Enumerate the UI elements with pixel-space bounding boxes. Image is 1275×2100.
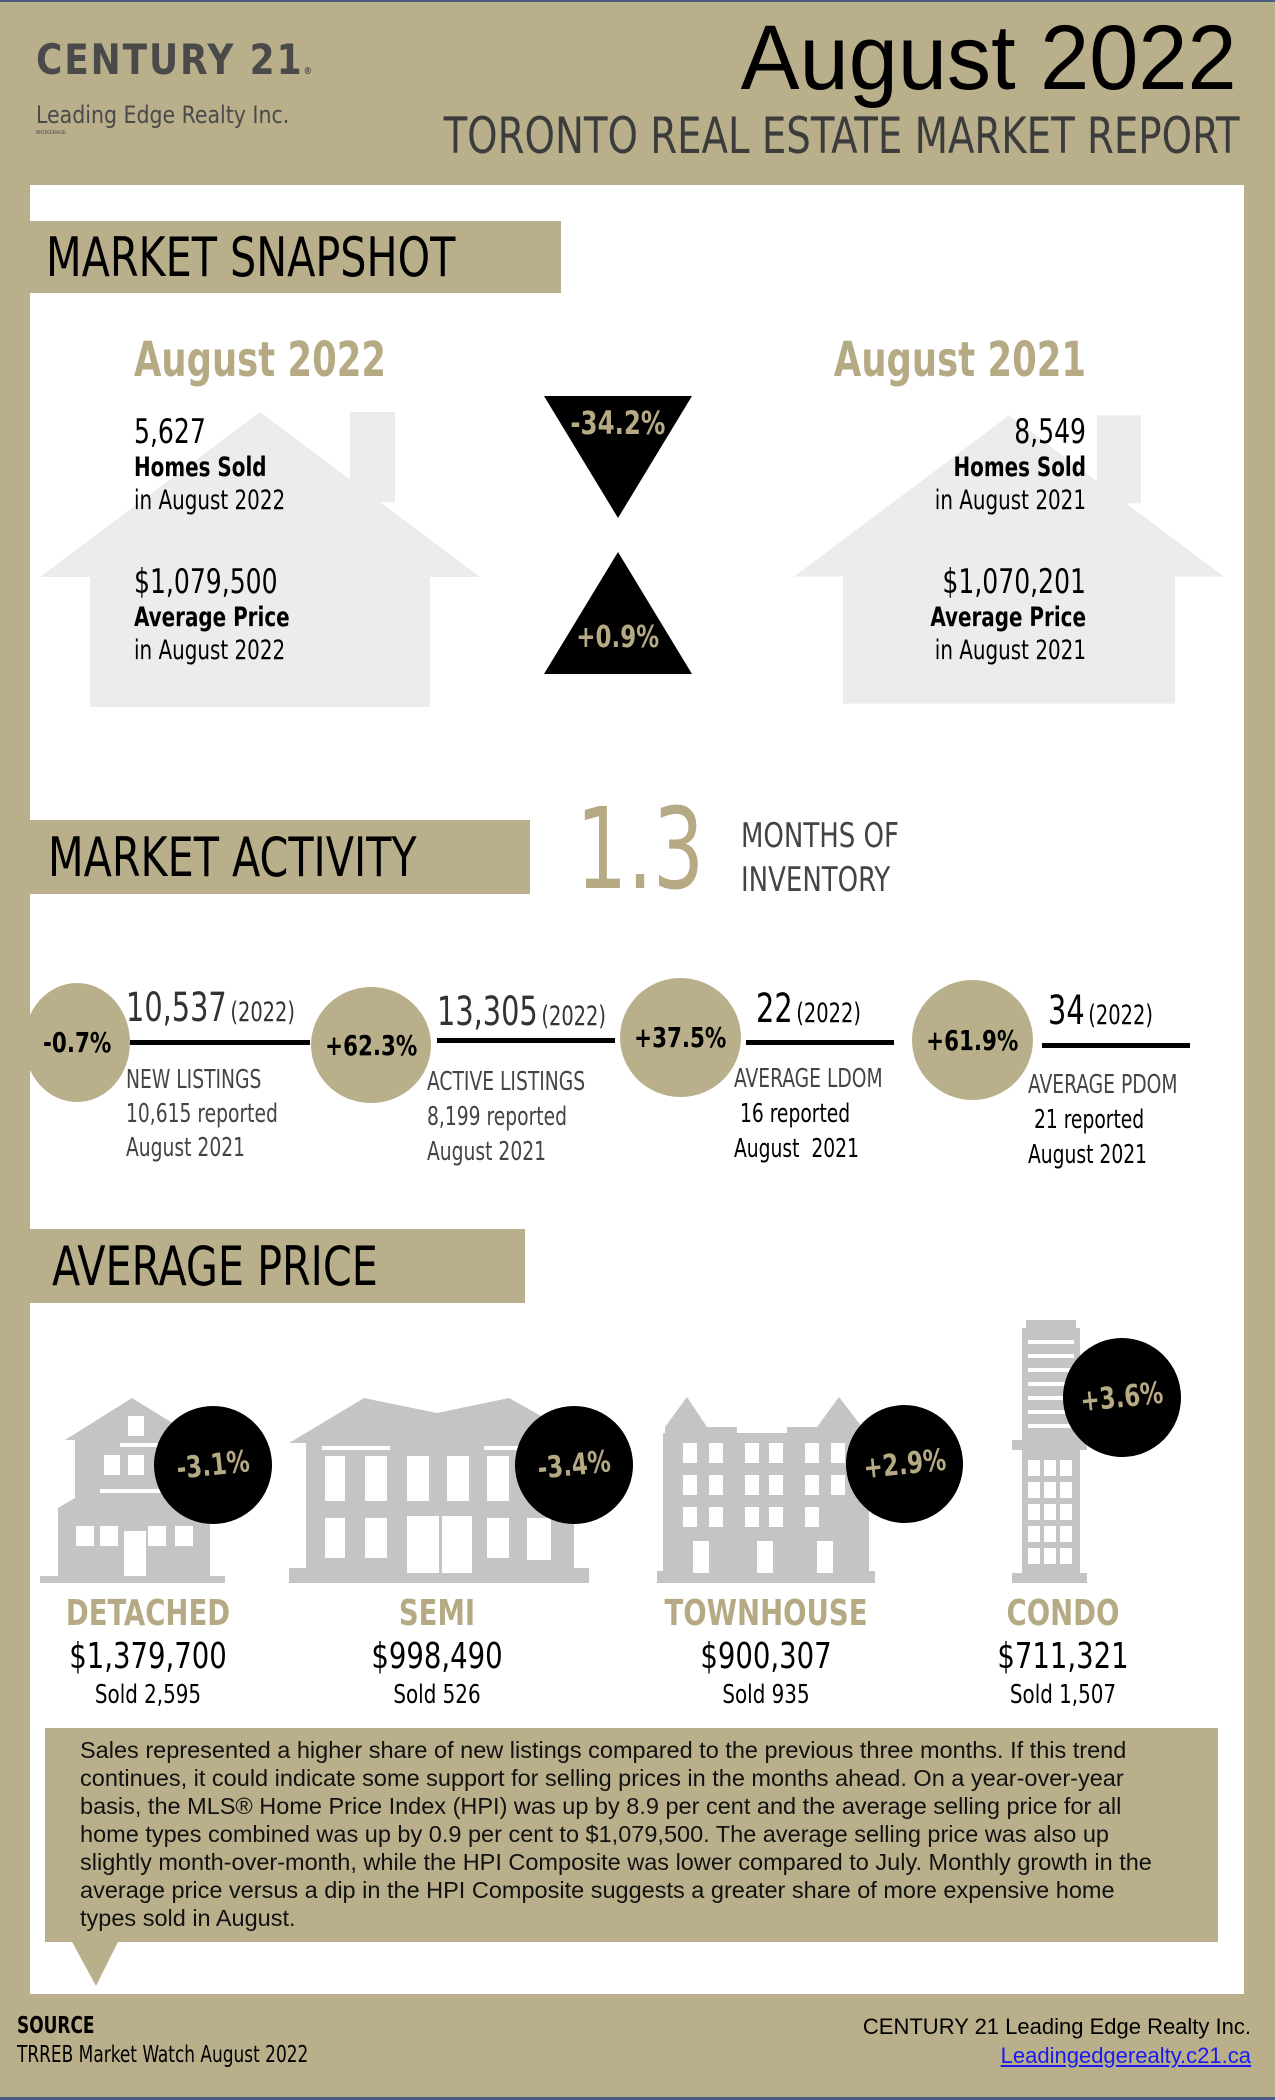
snapshot 2021 column: August 2021	[834, 332, 1086, 388]
stat: average pdom: 34 (2022)	[1048, 988, 1153, 1034]
snapshot 2022 column: 5,627	[134, 412, 206, 452]
heading: market activity: MARKET ACTIVITY	[48, 826, 417, 888]
label: months of inventory	[741, 816, 899, 900]
icon: house right	[794, 416, 1224, 704]
badge: +2.9%	[840, 1399, 969, 1529]
snapshot 2021 column: 8,549	[1014, 412, 1086, 452]
heading: market snapshot: MARKET SNAPSHOT	[46, 226, 455, 288]
label: detached: Sold 2,595	[95, 1680, 201, 1710]
arrow: up triangle +0.9%: +0.9%	[577, 620, 659, 655]
snapshot 2021 column: Homes Sold	[953, 452, 1086, 483]
snapshot 2021 column: in August 2021	[935, 635, 1086, 666]
callout: summary text: home types combined was up by 0.9 per cent to $1,079,500. The average selling price was also up	[80, 1821, 1109, 1847]
label: condo: $711,321	[997, 1636, 1129, 1677]
building: townhouse	[657, 1397, 963, 1583]
footer: company: CENTURY 21 Leading Edge Realty Inc.	[863, 2014, 1251, 2039]
logo: CENTURY 21®	[36, 35, 314, 84]
snapshot 2022 column: August 2022	[134, 332, 386, 388]
callout: summary text: average price versus a dip in the HPI Composite suggests a greater share of more expensive home	[80, 1877, 1115, 1903]
snapshot 2022 column: Average Price	[134, 602, 290, 633]
label: semi	[371, 1593, 503, 1710]
stat: average pdom: 21 reported	[1034, 1105, 1144, 1135]
label: detached: DETACHED	[66, 1593, 230, 1634]
label: condo: Sold 1,507	[1010, 1680, 1116, 1710]
stat: active listings: +62.3%	[325, 1028, 417, 1062]
stat: new listings: 10,537 (2022)	[126, 985, 295, 1031]
callout: summary text: Sales represented a higher share of new listings compared to the previous three months. If this trend	[80, 1737, 1126, 1763]
stat: average pdom: +61.9%	[926, 1024, 1019, 1056]
footer: source: TRREB Market Watch August 2022	[17, 2042, 308, 2068]
footer: source	[16, 2013, 308, 2068]
label: detached	[66, 1593, 230, 1710]
top border line	[0, 0, 1275, 2]
stat: active listings: 13,305 (2022)	[437, 989, 606, 1035]
label: semi: $998,490	[371, 1636, 503, 1677]
label: townhouse	[664, 1593, 868, 1710]
stat: average pdom: AVERAGE PDOM	[1028, 1070, 1178, 1100]
logo: Leading Edge Realty Inc.	[36, 101, 289, 129]
stat: active listings: ACTIVE LISTINGS	[427, 1067, 585, 1097]
badge: -3.4%	[509, 1400, 639, 1530]
stat: active listings: August 2021	[427, 1137, 546, 1167]
snapshot 2022 column	[134, 332, 386, 666]
label: condo	[997, 1593, 1129, 1710]
snapshot 2022 column: in August 2022	[134, 635, 285, 666]
heading: market snapshot	[30, 221, 561, 293]
badge: -3.1%	[148, 1400, 278, 1530]
stat: new listings: August 2021	[126, 1133, 245, 1163]
label: months of inventory: INVENTORY	[741, 860, 890, 900]
snapshot 2021 column: Average Price	[930, 602, 1086, 633]
snapshot 2021 column	[834, 332, 1086, 666]
label: detached: $1,379,700	[69, 1636, 227, 1677]
callout: summary text: basis, the MLS® Home Price Index (HPI) was up by 8.9 per cent and the average selling price for all	[80, 1793, 1121, 1819]
badge: +2.9%: +2.9%	[861, 1442, 948, 1486]
stat: average ldom: AVERAGE LDOM	[734, 1064, 883, 1094]
snapshot 2021 column: in August 2021	[935, 485, 1086, 516]
arrow: up triangle +0.9%	[544, 552, 692, 674]
callout: summary text: slightly month-over-month, while the HPI Composite was lower compared to July. Monthly growth in the	[80, 1849, 1152, 1875]
title: August 2022	[741, 7, 1237, 109]
label: semi: Sold 526	[393, 1680, 481, 1710]
badge: -3.4%: -3.4%	[536, 1444, 612, 1486]
stat: average pdom: August 2021	[1028, 1140, 1147, 1170]
logo	[36, 35, 314, 136]
heading: average price: AVERAGE PRICE	[52, 1234, 378, 1298]
stat: average ldom: 22 (2022)	[756, 986, 861, 1032]
footer: source: SOURCE	[17, 2013, 95, 2039]
label: townhouse: TOWNHOUSE	[664, 1593, 868, 1634]
arrow: down triangle -34.2%	[544, 396, 692, 518]
text: BROKERAGE	[36, 130, 66, 136]
subtitle: TORONTO REAL ESTATE MARKET REPORT	[443, 107, 1239, 165]
stat: new listings: 10,615 reported	[126, 1099, 278, 1129]
building: detached	[40, 1398, 272, 1583]
bottom border line	[0, 2097, 1275, 2100]
stat: average pdom	[912, 980, 1190, 1170]
heading: market activity	[30, 820, 530, 894]
callout: summary text: continues, it could indicate some support for selling prices in the months ahead. On a year-over-year	[80, 1765, 1124, 1791]
label: townhouse: Sold 935	[722, 1680, 810, 1710]
snapshot 2022 column: $1,079,500	[134, 562, 278, 602]
badge: +3.6%	[1057, 1332, 1187, 1463]
snapshot 2022 column: in August 2022	[134, 485, 285, 516]
stat: active listings	[311, 987, 615, 1167]
stat: active listings: 8,199 reported	[427, 1102, 567, 1132]
badge: -3.1%: -3.1%	[175, 1444, 251, 1486]
stat: new listings: NEW LISTINGS	[126, 1065, 261, 1095]
stat: average ldom: 16 reported	[740, 1099, 850, 1129]
label: townhouse: $900,307	[700, 1636, 832, 1677]
footer: company	[863, 2014, 1251, 2068]
label: condo: CONDO	[1007, 1593, 1119, 1634]
badge: +3.6%: +3.6%	[1079, 1376, 1165, 1419]
label: months of inventory: MONTHS OF	[741, 816, 899, 856]
building: condo	[1012, 1320, 1181, 1583]
stat: months of inventory: 1.3	[576, 785, 704, 915]
icon: house left	[40, 412, 480, 707]
heading: average price	[30, 1229, 525, 1303]
snapshot 2021 column: $1,070,201	[942, 562, 1086, 602]
stat: average ldom: +37.5%	[634, 1021, 727, 1054]
stat: new listings: -0.7%	[43, 1026, 111, 1059]
footer: company: Leadingedgerealty.c21.ca	[1001, 2043, 1251, 2068]
building: semi	[289, 1398, 633, 1583]
stat: average ldom: August 2021	[734, 1134, 859, 1164]
arrow: down triangle -34.2%: -34.2%	[570, 404, 666, 442]
label: semi: SEMI	[399, 1593, 475, 1634]
stat: average ldom	[620, 978, 894, 1164]
callout: summary text: types sold in August.	[80, 1905, 296, 1931]
callout: summary text	[45, 1728, 1218, 1986]
snapshot 2022 column: Homes Sold	[134, 452, 267, 483]
stat: new listings	[30, 983, 310, 1163]
